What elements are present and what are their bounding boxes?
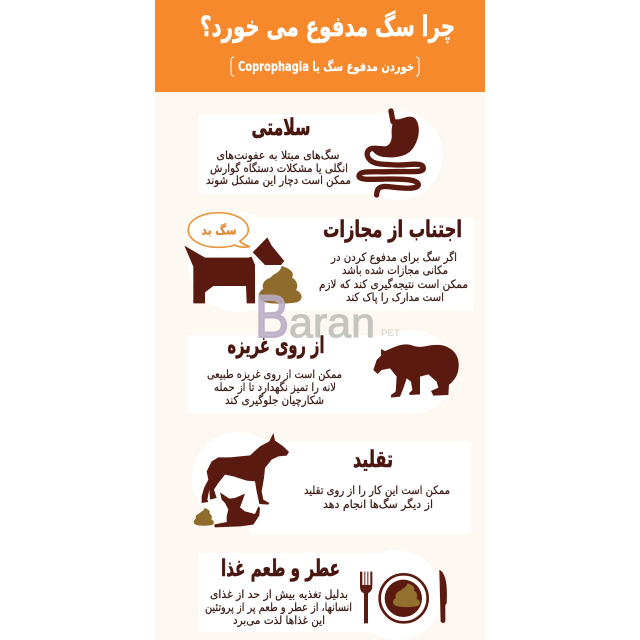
text: imitation (304, 483, 450, 512)
page background panel (155, 0, 485, 640)
text: food smell and taste: بدلیل تغذیه بیش از حد از غذای (210, 587, 348, 602)
subtitle (231, 57, 419, 76)
text: avoiding punishment: ممکن است نتیجه‌گیری کند که لازم (319, 277, 468, 292)
heading: instinct: از روی غریزه (228, 333, 324, 359)
panel: imitation (192, 432, 471, 534)
heading: avoiding punishment: اجتناب از مجازات (323, 217, 462, 243)
subtitle: خوردن مدفوع سگ یا Coprophagia (238, 59, 414, 75)
bubble label: سگ بد (201, 222, 236, 237)
panel: avoiding punishment (184, 212, 474, 312)
text: avoiding punishment (319, 250, 468, 305)
watermark: Baran Pet: PET (381, 328, 401, 338)
heading: imitation: تقلید (353, 447, 393, 473)
text: instinct: لانه را تمیز نگهدارد تا از حمله (214, 380, 336, 395)
text: avoiding punishment: مکانی مجازات شده باشد (342, 263, 448, 278)
icon: small poop (194, 508, 214, 526)
text: health: ممکن است دچار این مشکل شوند (206, 173, 351, 188)
icon: speech bubble (188, 213, 250, 247)
watermark: Baran Pet: B (255, 283, 289, 350)
panel: food smell and taste (199, 550, 447, 640)
panel: instinct (188, 330, 459, 414)
text: food smell and taste: انسانها، از عطر و طعم پر از پروتئین (205, 600, 352, 615)
text: instinct: شکارچیان جلوگیری کند (225, 393, 324, 408)
title: چرا سگ مدفوع می خورد؟ (200, 10, 455, 43)
heading: food smell and taste: عطر و طعم غذا (221, 556, 340, 582)
text: avoiding punishment: اگر سگ برای مدفوع کردن در (330, 250, 457, 265)
panel: health (199, 110, 443, 200)
text: instinct: ممکن است از روی غریزه طبیعی (207, 367, 342, 382)
watermark: Baran Pet: aran (289, 299, 375, 346)
icon: plate with fork and knife (360, 570, 447, 623)
text: imitation: از دیگر سگ‌ها انجام دهد (323, 497, 433, 512)
icon: dog (184, 237, 284, 303)
text: food smell and taste (205, 587, 352, 628)
text: food smell and taste: این غذاها لذت می‌برد (233, 613, 325, 628)
icon: bear (373, 344, 459, 398)
text: health: انگلی یا مشکلات دستگاه گوارش (210, 161, 348, 176)
text: avoiding punishment: است مدارک را پاک کند (346, 290, 444, 305)
icon: stomach and intestines (359, 111, 423, 195)
header banner (155, 0, 485, 92)
watermark: Baran Pet (255, 283, 401, 350)
text: instinct (207, 367, 342, 408)
text: health: سگ‌های مبتلا به عفونت‌های (216, 148, 340, 163)
text: health (206, 148, 351, 188)
heading: health: سلامتی (252, 115, 310, 141)
icon: poop (259, 266, 302, 304)
text: imitation: ممکن است این کار را از روی تقلید (304, 483, 450, 498)
icon: two dogs (202, 433, 289, 527)
